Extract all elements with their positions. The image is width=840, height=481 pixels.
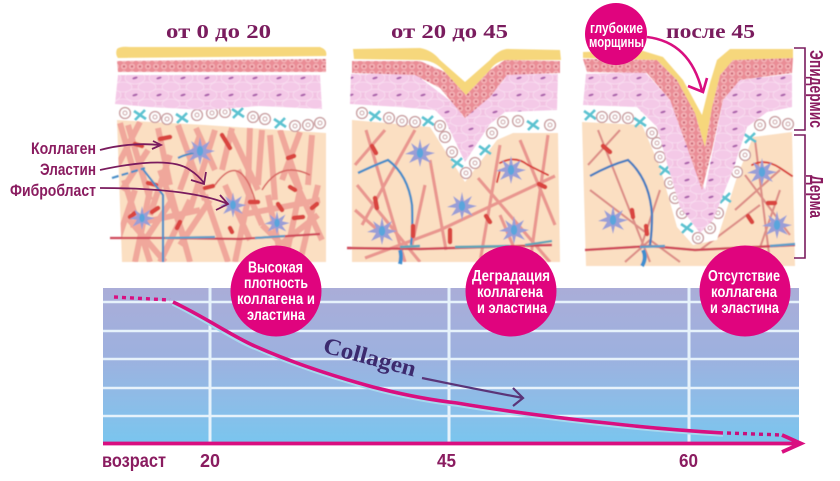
arrow: Эластин pointer <box>100 162 206 184</box>
axis label: возраст: возраст <box>102 451 166 472</box>
dotted start <box>114 297 170 300</box>
axis arrow <box>103 435 801 452</box>
dermis background <box>117 120 326 262</box>
callout: high density: эластина <box>247 307 305 324</box>
callout: deep wrinkles: глубокие <box>590 21 643 37</box>
vessels <box>110 153 320 262</box>
arrow: trend <box>422 378 523 406</box>
callout: absence: коллагена <box>711 284 777 301</box>
basal cell row <box>357 108 555 178</box>
curve highlight <box>173 303 723 434</box>
axis tick: 45: 45 <box>437 450 456 471</box>
callout: degradation <box>466 246 556 336</box>
collagen fibres <box>355 130 555 262</box>
basal cell row <box>120 107 325 131</box>
red crosslinks <box>130 135 317 232</box>
panel: skin section age 0 to 20 <box>110 47 326 262</box>
callout: deep wrinkles: морщины <box>589 35 644 51</box>
label: Эластин: Эластин <box>40 160 96 179</box>
panel: skin section age 20 to 45 <box>347 48 561 264</box>
fibroblasts <box>129 137 290 235</box>
label: Эпидермис: Эпидермис <box>806 50 826 128</box>
fibroblasts <box>598 158 792 239</box>
callout: degradation: и эластина <box>477 300 547 317</box>
collagen fibres <box>588 130 790 262</box>
vessels <box>585 160 795 266</box>
chart: collagen over age <box>103 288 801 452</box>
basal cell row <box>584 110 793 243</box>
bracket: dermis <box>794 135 805 258</box>
title: от 20 до 45: от 20 до 45 <box>391 21 508 43</box>
bracket: epidermis <box>794 48 805 130</box>
chart background <box>103 288 799 442</box>
callout: degradation: Деградация <box>472 268 550 285</box>
axis tick: 60: 60 <box>679 450 698 471</box>
arrow: Коллаген pointer <box>100 141 161 150</box>
fibroblasts <box>367 139 529 245</box>
arrow: wrinkle pointer <box>647 37 707 92</box>
dermis background <box>582 122 795 266</box>
title: после 45: после 45 <box>666 21 755 43</box>
epidermis layers <box>115 75 322 110</box>
red crosslinks <box>372 146 548 242</box>
red crosslinks <box>603 146 792 234</box>
dermis background <box>352 120 560 262</box>
grid lines <box>103 288 799 442</box>
title: от 0 до 20: от 0 до 20 <box>166 21 271 43</box>
callout: high density <box>230 246 322 336</box>
callout: degradation: коллагена <box>477 284 543 301</box>
callout: deep wrinkles <box>585 3 647 65</box>
epidermis layers <box>583 72 792 233</box>
callout: high density: плотность <box>244 275 308 292</box>
callout: high density: коллагена и <box>237 291 315 308</box>
axis tick: 20: 20 <box>200 450 220 471</box>
callout: absence <box>700 246 790 336</box>
label: Дерма: Дерма <box>806 175 826 219</box>
label: Фибробласт: Фибробласт <box>10 181 96 200</box>
dotted end <box>727 433 782 435</box>
callout: absence: и эластина <box>710 300 779 317</box>
curve label: Collagen <box>321 333 419 381</box>
collagen fibres <box>118 122 322 262</box>
vessels <box>347 160 552 264</box>
collagen curve <box>173 302 723 433</box>
callout: absence: Отсутствие <box>708 268 780 285</box>
callout: high density: Высокая <box>248 260 303 276</box>
panel: skin section after age 45 <box>582 49 795 266</box>
elastin arcs <box>215 170 310 200</box>
arrow: Фибробласт pointer <box>100 188 228 210</box>
epidermis layers <box>350 74 558 162</box>
label: Коллаген: Коллаген <box>31 139 96 158</box>
